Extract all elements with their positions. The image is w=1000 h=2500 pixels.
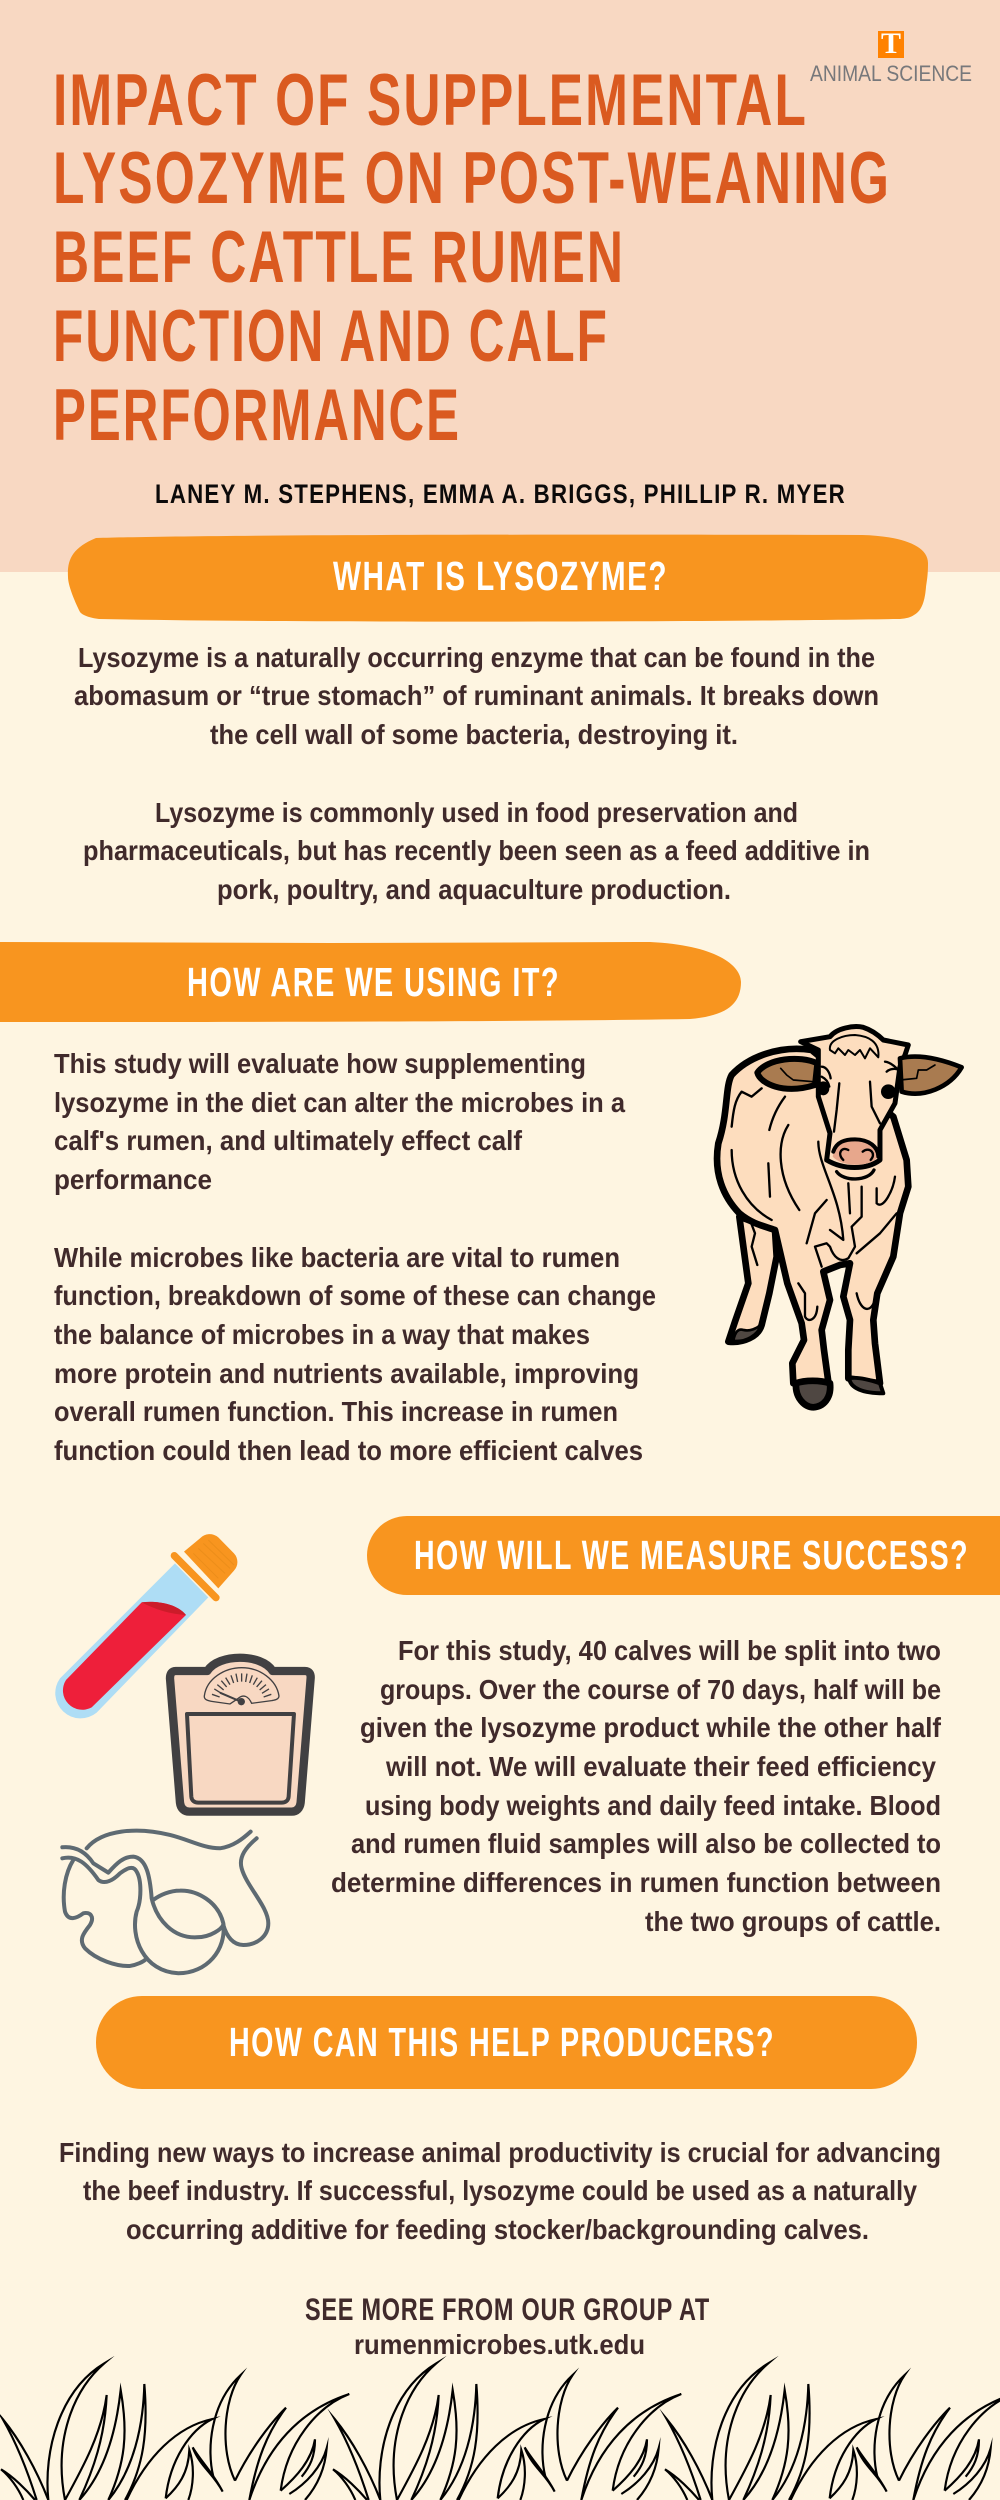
text block: what is lysozyme: abomasum or “true stomach” of ruminant animals. It breaks down	[74, 680, 879, 711]
calf ear right	[900, 1057, 962, 1094]
text block: what is lysozyme: the cell wall of some bacteria, destroying it.	[210, 719, 738, 750]
icon: calf	[717, 1027, 962, 1407]
text block: what is lysozyme: pharmaceuticals, but has recently been seen as a feed additive in	[83, 835, 870, 866]
calf ear left	[757, 1059, 817, 1089]
text block: how are we using it: calf's rumen, and ultimately effect calf	[54, 1125, 523, 1156]
text block: how will we measure success	[331, 1635, 942, 1937]
text block: how are we using it	[54, 1048, 656, 1466]
text block: what is lysozyme	[74, 642, 879, 905]
section header: what is lysozyme: WHAT IS LYSOZYME?	[333, 553, 668, 599]
authors: LANEY M. STEPHENS, EMMA A. BRIGGS, PHILLIP R. MYER	[155, 479, 846, 509]
title: FUNCTION AND CALF	[53, 294, 609, 377]
text block: how are we using it: performance	[54, 1164, 212, 1195]
text block: how are we using it: function, breakdown of some of these can change	[54, 1280, 656, 1311]
text block: how will we measure success: using body weights and daily feed intake. Blood	[365, 1790, 941, 1821]
section header: how are we using it: HOW ARE WE USING IT?	[187, 959, 560, 1005]
logo: Animal Science: T	[881, 27, 901, 60]
text block: how will we measure success: will not. We will evaluate their feed efficiency	[385, 1751, 936, 1782]
text block: how can this help producers	[59, 2137, 941, 2245]
call to action: rumenmicrobes.utk.edu	[354, 2329, 645, 2360]
section header: how are we using it	[0, 942, 741, 1022]
text block: how will we measure success: and rumen fluid samples will also be collected to	[351, 1828, 941, 1859]
section header: how will we measure success	[367, 1516, 1000, 1595]
text block: how will we measure success: the two groups of cattle.	[645, 1906, 941, 1937]
logo: Animal Science: ANIMAL SCIENCE	[810, 61, 972, 86]
header background panel	[0, 0, 1000, 572]
calf hind leg	[728, 1217, 777, 1342]
calf nose	[833, 1139, 878, 1179]
calf body and front legs	[717, 1049, 908, 1383]
calf eyes	[817, 1081, 829, 1095]
title: PERFORMANCE	[53, 373, 461, 456]
text block: how are we using it: function could then lead to more efficient calves	[54, 1435, 643, 1466]
text block: how are we using it: more protein and nutrients available, improving	[54, 1358, 639, 1389]
text block: what is lysozyme: Lysozyme is a naturally occurring enzyme that can be found in the	[78, 642, 875, 673]
title	[53, 58, 891, 456]
icon: blood test tube	[55, 1534, 237, 1718]
text block: how are we using it: While microbes like bacteria are vital to rumen	[54, 1242, 620, 1273]
icon: weighing scale	[170, 1658, 311, 1812]
section header: how can this help producers: HOW CAN THIS HELP PRODUCERS?	[229, 2019, 775, 2065]
text block: how can this help producers: occurring additive for feeding stocker/backgrounding calves.	[126, 2214, 869, 2245]
calf forelock	[830, 1035, 878, 1058]
text block: how will we measure success: groups. Over the course of 70 days, half will be	[380, 1674, 941, 1705]
calf fold lines	[732, 1062, 898, 1320]
logo: Animal Science	[810, 27, 972, 86]
text block: what is lysozyme: Lysozyme is commonly used in food preservation and	[155, 797, 798, 828]
text block: how are we using it: This study will evaluate how supplementing	[54, 1048, 586, 1079]
text block: how are we using it: lysozyme in the diet can alter the microbes in a	[54, 1087, 625, 1118]
text block: how can this help producers: the beef industry. If successful, lysozyme could be used as a naturally	[83, 2175, 917, 2206]
title: BEEF CATTLE RUMEN	[53, 215, 625, 298]
calf head	[801, 1027, 908, 1167]
text block: how will we measure success: given the lysozyme product while the other half	[360, 1712, 942, 1743]
text block: what is lysozyme: pork, poultry, and aquaculture production.	[217, 874, 731, 905]
text block: how are we using it: the balance of microbes in a way that makes	[54, 1319, 590, 1350]
call to action	[305, 2291, 710, 2360]
icon group: measurement tools	[55, 1534, 311, 1973]
text block: how will we measure success: determine differences in rumen function between	[331, 1867, 941, 1898]
text block: how are we using it: overall rumen function. This increase in rumen	[54, 1396, 618, 1427]
icon: rumen stomach outline	[62, 1831, 268, 1973]
call to action: SEE MORE FROM OUR GROUP AT	[305, 2291, 710, 2327]
grass illustration	[1, 2363, 1000, 2500]
text block: how will we measure success: For this study, 40 calves will be split into two	[398, 1635, 941, 1666]
section header: how can this help producers	[96, 1996, 917, 2089]
calf hooves	[796, 1381, 830, 1407]
section header: what is lysozyme	[68, 535, 928, 622]
